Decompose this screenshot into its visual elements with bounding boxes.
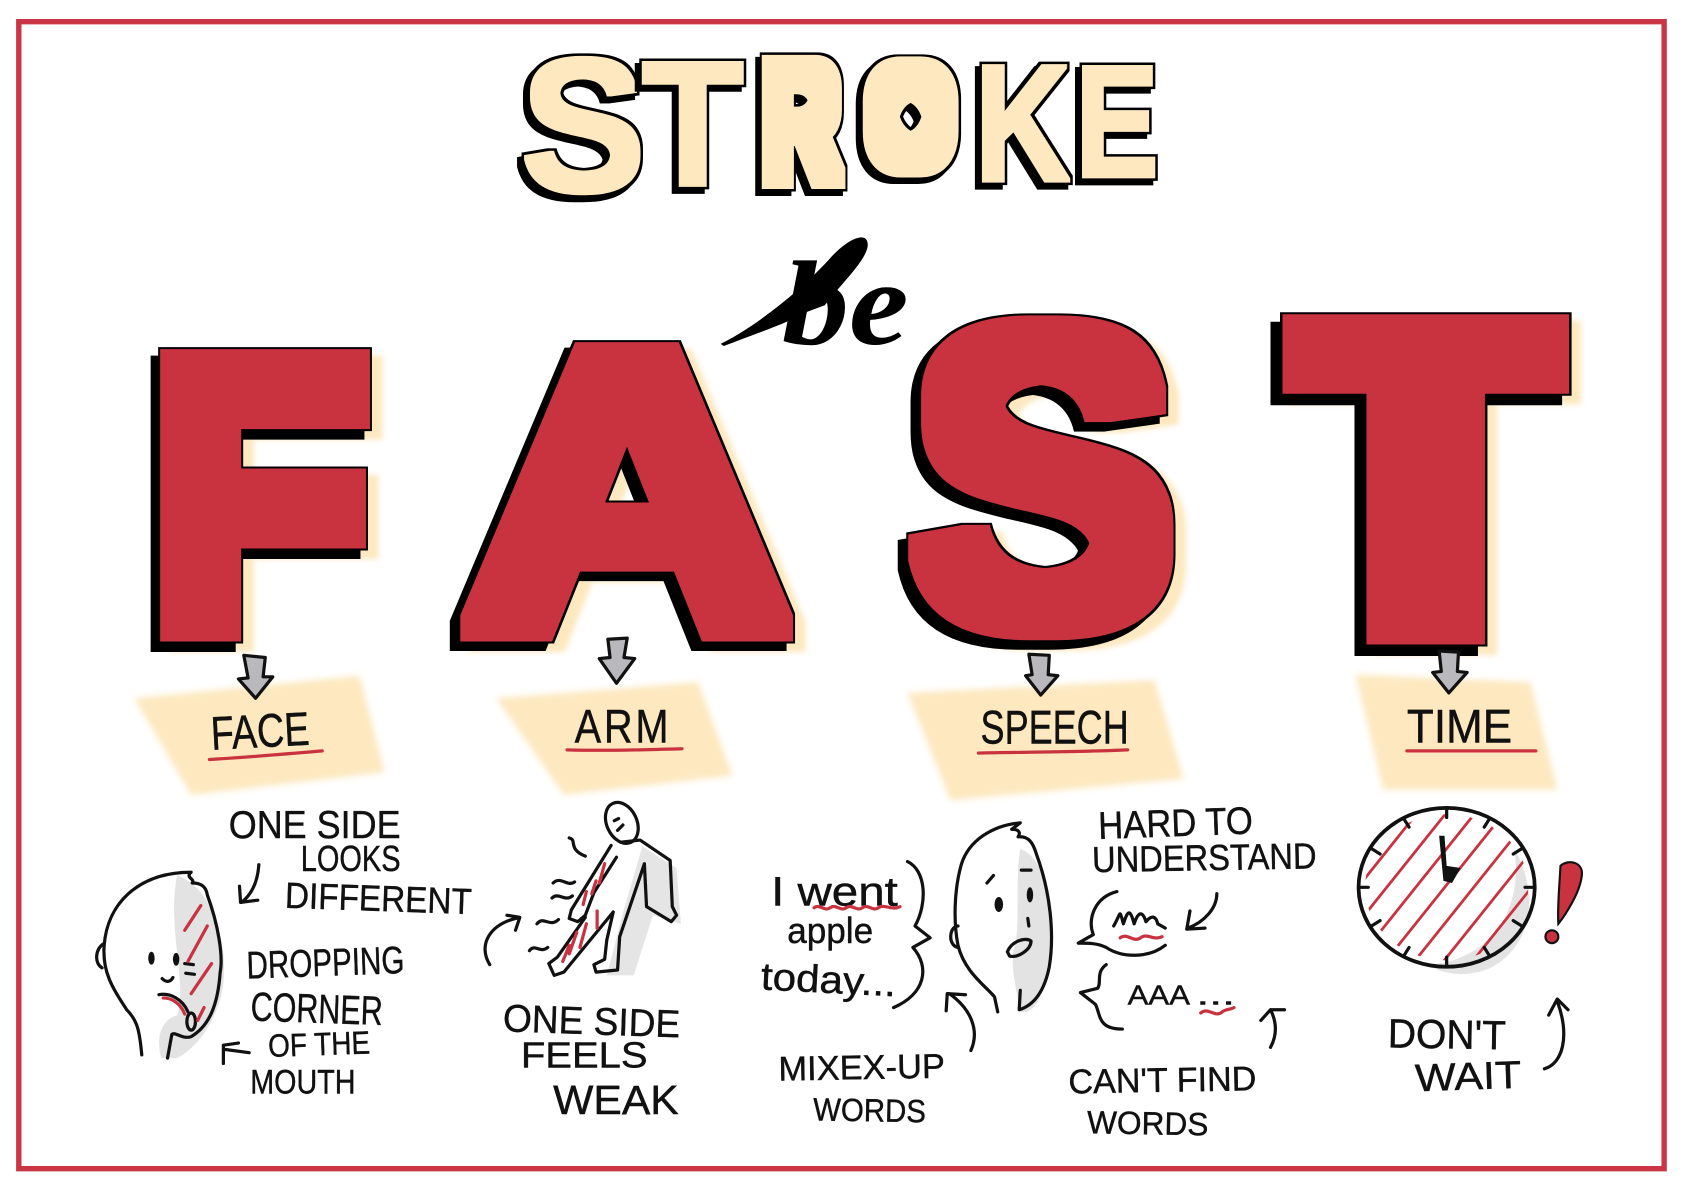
arrow down: [1026, 654, 1058, 695]
red underline: [567, 749, 682, 750]
text: don't wait: WAIT: [1414, 1054, 1522, 1100]
panel: speech symptoms: [760, 800, 1317, 1142]
arrow to bubble: [1187, 894, 1217, 929]
empty speech brace with AAA: ...: [1196, 979, 1235, 1010]
title: STROKE: S: [520, 19, 646, 233]
text: dropping corner of the mouth: OF THE: [267, 1024, 371, 1064]
speech bubble with scribble: [1078, 892, 1165, 955]
text: mixed-up words: MIXEX-UP: [778, 1048, 945, 1089]
text: I went apple today: today...: [760, 955, 897, 1005]
text: can't find words: WORDS: [1087, 1104, 1209, 1142]
text: mixed-up words: [778, 1048, 945, 1129]
arrow to face: [239, 865, 259, 902]
text: one side looks different: LOOKS: [301, 838, 401, 879]
title: STROKE: T: [642, 25, 744, 223]
label ARM: ARM: [575, 700, 671, 753]
head shadow: [1013, 849, 1053, 1012]
face outline: [97, 872, 221, 1058]
weakness squiggles: [529, 838, 585, 951]
text: mixed-up words: WORDS: [813, 1091, 926, 1129]
big letter S: S: [910, 242, 1176, 713]
stick figure body: [549, 819, 677, 975]
brace: [894, 862, 930, 1008]
arrow down: [238, 655, 273, 698]
text: dropping corner of the mouth: [246, 939, 405, 1102]
big letter T: T: [1310, 236, 1541, 722]
red underline: [209, 751, 322, 760]
script word: be: be: [782, 238, 909, 371]
panel: face label: [134, 655, 384, 795]
clock hatching: [1365, 814, 1528, 960]
clock shadow: [1428, 849, 1529, 974]
text: one side looks different: [229, 804, 473, 922]
label FACE: FACE: [209, 703, 311, 761]
label SPEECH: SPEECH: [981, 701, 1129, 754]
figure head: [599, 797, 645, 849]
arrow down: [1433, 651, 1467, 693]
title: STROKE: O: [868, 45, 954, 189]
red underline: [1407, 749, 1536, 752]
text: one side feels weak: FEELS: [521, 1035, 648, 1076]
panel: time label: [1355, 651, 1557, 790]
text: hard to understand: UNDERSTAND: [1092, 835, 1317, 880]
big letter A: A: [462, 269, 792, 713]
exclamation mark: [1545, 862, 1582, 943]
red hatching on arm: [563, 864, 605, 961]
text: dropping corner of the mouth: CORNER: [250, 984, 384, 1034]
text: one side feels weak: WEAK: [553, 1077, 679, 1123]
cream patch: [496, 682, 732, 795]
arrow up to clock: [1544, 999, 1568, 1069]
text: I went apple today: apple: [787, 910, 873, 951]
text: one side feels weak: ONE SIDE: [502, 997, 681, 1046]
figure shadow: [607, 846, 681, 975]
red underline: [978, 750, 1128, 753]
text: don't wait: DON'T: [1387, 1010, 1506, 1058]
arrow to brace: [946, 994, 974, 1051]
face eyes and mouth: [148, 952, 195, 1030]
text: can't find words: CAN'T FIND: [1068, 1060, 1257, 1102]
empty speech brace with AAA: AAA: [1128, 979, 1190, 1010]
text: dropping corner of the mouth: MOUTH: [250, 1064, 355, 1102]
script word: be: [721, 237, 909, 371]
title: STROKE: R: [763, 31, 839, 214]
text: hard to understand: [1092, 800, 1317, 880]
panel: arm label: [496, 638, 732, 795]
cream patch: [1355, 675, 1557, 790]
label TIME: TIME: [1407, 700, 1512, 753]
arrow up: [1261, 1010, 1284, 1047]
red hatching: [185, 906, 212, 1020]
title: STROKE: K: [975, 29, 1070, 216]
text: one side feels weak: [502, 997, 681, 1123]
clock face: [1359, 808, 1535, 967]
big letter F: F: [151, 289, 368, 701]
title: STROKE: [520, 19, 1158, 233]
cream patch: [134, 676, 384, 795]
panel: face symptoms: [97, 804, 473, 1102]
clock ticks: [1360, 808, 1534, 967]
text: dropping corner of the mouth: DROPPING: [246, 939, 405, 988]
arrow down: [599, 638, 635, 683]
text: hard to understand: HARD TO: [1097, 800, 1254, 848]
text: I went apple today: [760, 869, 899, 1005]
red squiggle under went: [814, 906, 900, 909]
text: one side looks different: DIFFERENT: [284, 875, 473, 922]
head outline: [951, 823, 1052, 1012]
text: one side looks different: ONE SIDE: [229, 804, 401, 847]
cream patch: [908, 680, 1184, 800]
curved arrow to arm: [485, 915, 520, 965]
text: I went apple today: I went: [771, 869, 899, 915]
clock hands: [1439, 836, 1461, 883]
text: can't find words: [1068, 1060, 1257, 1142]
text: don't wait: [1387, 1010, 1522, 1100]
title: STROKE: E: [1076, 33, 1158, 211]
face details: [987, 870, 1033, 956]
empty speech brace with AAA: [1080, 965, 1235, 1029]
panel: time symptoms: [1356, 806, 1584, 1092]
panel: speech label: [908, 654, 1184, 800]
panel: arm symptoms: [485, 797, 681, 1123]
face shadow: [159, 875, 224, 1058]
arrow to mouth: [223, 1043, 249, 1063]
